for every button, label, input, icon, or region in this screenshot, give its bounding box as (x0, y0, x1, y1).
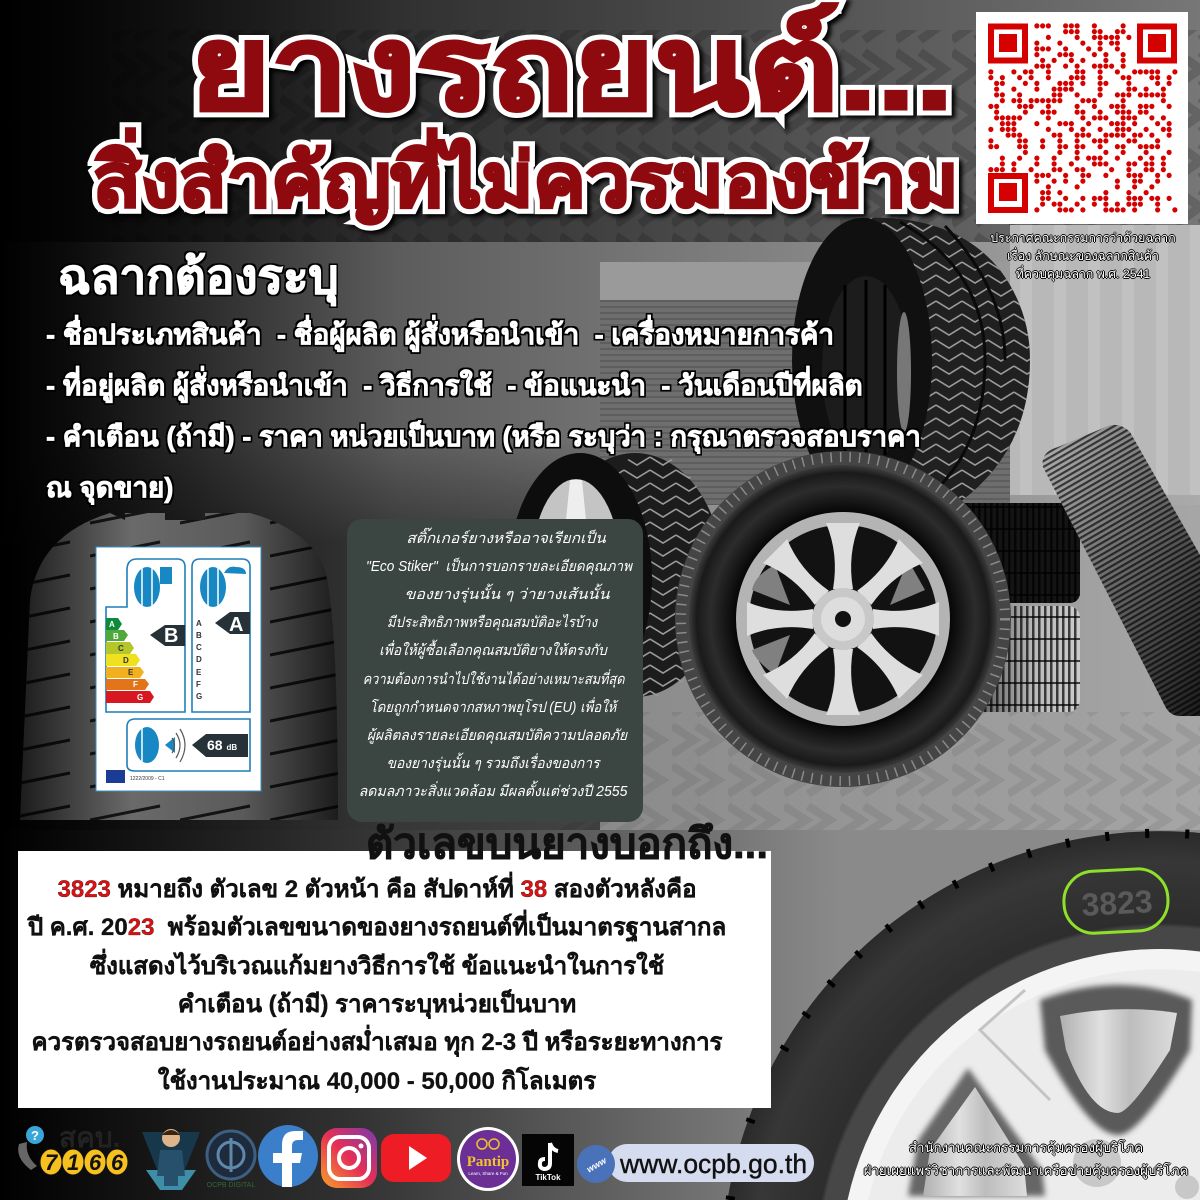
footer icon: Instagram (321, 1128, 377, 1188)
fuel rating scale: A (109, 620, 115, 629)
panel: tyre number explanation: ปี ค.ศ. 2023 พร้อมตัวเลขขนาดของยางรถยนต์ที่เป็นมาตรฐานสากล (28, 914, 726, 941)
label requirements text: - ชื่อประเภทสินค้า - ชื่อผู้ผลิต ผู้สั่งหรือนำเข้า - เครื่องหมายการค้า (46, 319, 834, 350)
footer logo: OCPB hotline 7166: สคบ. (59, 1122, 120, 1153)
panel: tyre number explanation (18, 851, 771, 1108)
wet grip letters: F (196, 680, 201, 689)
regulation citation: เรื่อง ลักษณะของฉลากสินค้า (1007, 249, 1159, 263)
highlighted date code 3823: 3823 (1081, 883, 1154, 923)
footer icon: mascot (142, 1129, 200, 1190)
large tyre close-up, lower right (728, 831, 1200, 1200)
footer logo: OCPB hotline 7166: 7166 (45, 1150, 124, 1175)
fuel rating scale: C (118, 644, 124, 653)
office credit: สำนักงานคณะกรรมการคุ้มครองผู้บริโภค (909, 1140, 1143, 1155)
website address pill (577, 1144, 814, 1183)
eco label card: 1222/2009 - C1 (130, 776, 165, 782)
fuel rating scale: E (128, 668, 134, 677)
front tyre with alloy wheel (675, 451, 1011, 787)
heading: label must state: ฉลากต้องระบุ (58, 251, 339, 304)
panel: tyre number explanation: 3823 หมายถึง ตัวเลข 2 ตัวหน้า คือ สัปดาห์ที่ 38 สองตัวหลังคือ (58, 876, 696, 903)
noise rating (192, 734, 248, 757)
footer icon: TikTok (522, 1134, 574, 1186)
eco label card: A (229, 614, 243, 636)
eco sticker description panel: เพื่อให้ผู้ซื้อเลือกคุณสมบัติยางให้ตรงกับ (379, 643, 607, 659)
footer logo: OCPB digital (206, 1130, 256, 1188)
regulation citation: ประกาศคณะกรรมการว่าด้วยฉลาก (990, 231, 1176, 245)
leaning tyre (1043, 425, 1200, 716)
office credit (864, 1139, 1188, 1180)
eco label card (96, 547, 261, 791)
rear tyre, left of front wheel (508, 453, 723, 703)
eco sticker description panel: ลดมลภาวะสิ่งแวดล้อม มีผลตั้งแต่ช่วงปี 2555 (359, 784, 627, 800)
tyre photo with EU eco label (20, 513, 338, 820)
heading: numbers on the tyre: ตัวเลขบนยางบอกถึง... (366, 820, 768, 867)
garage door and wall (600, 262, 1010, 300)
eco sticker description panel: "Eco Stiker" เป็นการบอกรายละเอียดคุณภาพ (366, 559, 632, 575)
highlighted date code 3823 (1062, 867, 1170, 935)
fuel rating scale: D (123, 656, 129, 665)
website address pill: www (585, 1155, 609, 1174)
upper standing tyre (792, 218, 1030, 502)
label requirements text: - คำเตือน (ถ้ามี) - ราคา หน่วยเป็นบาท (หรือ ระบุว่า : กรุณาตรวจสอบราคา (46, 421, 921, 452)
footer logo: OCPB hotline 7166 (18, 1122, 128, 1176)
eco sticker description panel: ผู้ผลิตลงรายละเอียดคุณสมบัติความปลอดภัย (367, 728, 627, 744)
top tread strip (0, 0, 1200, 242)
eco sticker description panel: ความต้องการนำไปใช้งานได้อย่างเหมาะสมที่สุด (363, 672, 625, 688)
title line 2: สิ่งสำคัญที่ไม่ควรมองข้าม (93, 139, 958, 222)
eco label card: 68 dB (207, 737, 237, 753)
eco sticker description panel: ของยางรุ่นนั้น ๆ รวมถึงเรื่องของการ (386, 756, 600, 772)
label requirements text: ณ จุดขาย) (46, 472, 174, 503)
icons: tyres (134, 567, 246, 763)
eco sticker description panel: มีประสิทธิภาพหรือคุณสมบัติอะไรบ้าง (387, 615, 597, 631)
wet grip letters: G (196, 692, 202, 701)
label requirements text (46, 313, 921, 506)
label requirements text: - ที่อยู่ผลิต ผู้สั่งหรือนำเข้า - วิธีการใช้ - ข้อแนะนำ - วันเดือนปีที่ผลิต (46, 370, 863, 401)
floor (0, 440, 600, 540)
panel: tyre number explanation: ควรตรวจสอบยางรถยนต์อย่างสม่ำเสมอ ทุก 2-3 ปี หรือระยะทางการ (32, 1029, 722, 1056)
fuel rating scale: G (137, 693, 143, 702)
wet grip letters: E (196, 668, 202, 677)
wet grip letters: D (196, 655, 202, 664)
fuel rating scale (106, 618, 154, 703)
fuel rating scale: B (113, 632, 119, 641)
regulation citation: ที่ควบคุมฉลาก พ.ศ. 2541 (1016, 267, 1150, 281)
EU flag and regulation number (106, 770, 125, 783)
footer logo: Pantip: Learn, Share & Fun (468, 1171, 508, 1176)
eco label card: B (164, 625, 178, 647)
footer icon: TikTok: TikTok (535, 1173, 561, 1182)
office credit: ฝ่ายเผยแพร่วิชาการและพัฒนาเครือข่ายคุ้มครองผู้บริโภค (864, 1163, 1188, 1178)
website address pill: www.ocpb.go.th (619, 1149, 807, 1179)
title line 1: ยางรถยนต์... (190, 3, 954, 135)
wet grip letters: A (196, 619, 202, 628)
footer logo: Pantip: Pantip (467, 1154, 509, 1170)
regulation citation (990, 230, 1176, 282)
fuel rating scale: F (133, 680, 138, 689)
eco sticker description panel: ของยางรุ่นนั้น ๆ ว่ายางเส้นนั้น (405, 587, 609, 603)
eco sticker description panel (347, 519, 643, 822)
panel: tyre number explanation: ซึ่งแสดงไว้บริเวณแก้มยางวิธีการใช้ ข้อแนะนำในการใช้ (90, 953, 664, 980)
stacked tyres (780, 503, 1080, 712)
panel: tyre number explanation: ใช้งานประมาณ 40,000 - 50,000 กิโลเมตร (158, 1068, 596, 1095)
eco sticker description panel: โดยถูกกำหนดจากสหภาพยุโรป (EU) เพื่อให้ (370, 700, 616, 716)
footer logo: Pantip (457, 1127, 519, 1191)
panel: tyre number explanation: คำเตือน (ถ้ามี) ราคาระบุหน่วยเป็นบาท (178, 991, 576, 1018)
wet grip letters: B (196, 631, 202, 640)
footer logo: OCPB hotline 7166: ? (31, 1128, 39, 1143)
eco sticker description panel: สติ๊กเกอร์ยางหรืออาจเรียกเป็น (406, 531, 606, 547)
QR code (976, 12, 1188, 224)
footer icon: YouTube (381, 1134, 451, 1182)
wet grip letters (196, 619, 202, 701)
footer icon: Facebook (258, 1125, 318, 1187)
wet grip letters: C (196, 643, 202, 652)
